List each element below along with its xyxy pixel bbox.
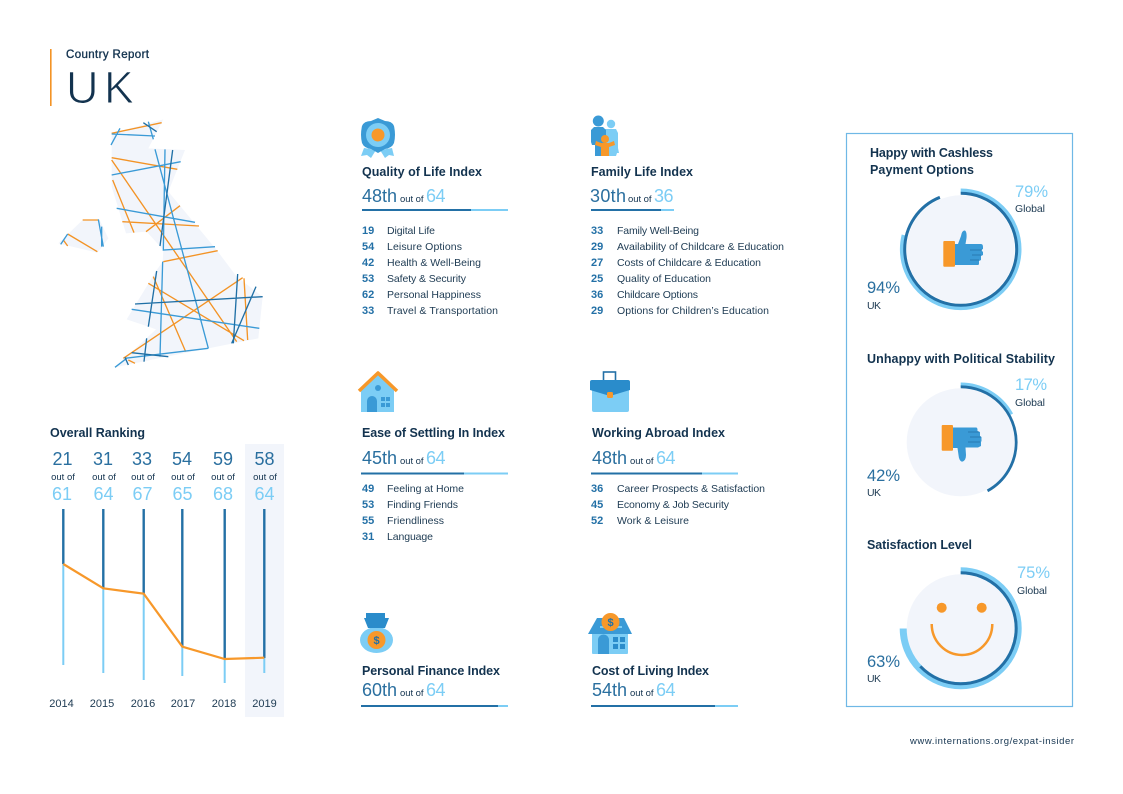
rank labels: out of bbox=[211, 472, 235, 483]
list: settling in subcategories: Language bbox=[387, 531, 433, 543]
list: quality of life subcategories: Safety & Security bbox=[387, 273, 467, 285]
rank labels: 31 bbox=[93, 449, 113, 469]
panel: personal finance index: 64 bbox=[426, 680, 446, 700]
chart: political stability bbox=[867, 352, 1055, 500]
year axis: 2019 bbox=[252, 698, 277, 710]
footer url: www.internations.org/expat-insider bbox=[909, 736, 1074, 747]
panel: cost of living index: 54th bbox=[592, 680, 627, 700]
rank labels: 67 bbox=[132, 484, 153, 504]
panel: family life index: out of bbox=[628, 194, 652, 205]
panel: personal finance index: out of bbox=[400, 688, 424, 699]
list: family life subcategories: 27 bbox=[591, 257, 603, 269]
list: settling in subcategories: 53 bbox=[362, 499, 374, 511]
list: quality of life subcategories: 42 bbox=[362, 257, 374, 269]
chart: satisfaction level: 75% bbox=[1017, 564, 1050, 582]
map of the UK bbox=[58, 119, 263, 367]
panel: cost of living index: out of bbox=[630, 688, 654, 699]
icon: house bbox=[359, 373, 397, 412]
chart: satisfaction level: Global bbox=[1017, 585, 1047, 597]
panel: personal finance index: 60th bbox=[362, 680, 397, 700]
chart: political stability: Global bbox=[1015, 397, 1045, 409]
chart: satisfaction level: 63% bbox=[867, 653, 900, 671]
rank labels: 65 bbox=[172, 484, 193, 504]
rank labels: out of bbox=[253, 472, 277, 483]
icon: house with coin: $ bbox=[607, 617, 614, 629]
list: settling in subcategories: Friendliness bbox=[387, 515, 444, 527]
icon: money bag bbox=[360, 613, 393, 653]
year axis bbox=[49, 698, 277, 710]
list: family life subcategories: Childcare Options bbox=[617, 289, 698, 301]
year axis: 2017 bbox=[171, 698, 195, 710]
icon: thumbs down bbox=[942, 425, 982, 462]
rank labels bbox=[51, 449, 277, 504]
rank labels: 64 bbox=[93, 484, 114, 504]
panel: quality of life index: 64 bbox=[426, 186, 446, 206]
year axis: 2016 bbox=[131, 698, 155, 710]
chart: political stability: UK bbox=[867, 487, 881, 499]
list: working abroad subcategories: 52 bbox=[591, 515, 603, 527]
chart: political stability: Unhappy with Political Stability bbox=[867, 352, 1055, 366]
list: family life subcategories: Family Well-Being bbox=[617, 225, 699, 237]
panel: cost of living index bbox=[588, 613, 738, 707]
list: settling in subcategories: 49 bbox=[362, 483, 374, 495]
list: quality of life subcategories: 53 bbox=[362, 273, 374, 285]
panel: working abroad index: 64 bbox=[656, 448, 676, 468]
list: quality of life subcategories: Personal Happiness bbox=[387, 289, 481, 301]
title: Country Report UK: Country Report bbox=[66, 49, 150, 61]
list: family life subcategories: Quality of Education bbox=[617, 273, 711, 285]
rank labels: 61 bbox=[52, 484, 72, 504]
chart: satisfaction level bbox=[867, 538, 1050, 686]
panel: personal finance index bbox=[360, 613, 508, 707]
list: quality of life subcategories: Leisure Options bbox=[387, 241, 462, 253]
highlight: 2019 column bbox=[245, 444, 284, 717]
list: family life subcategories: 33 bbox=[591, 225, 603, 237]
icon: house with coin bbox=[588, 613, 632, 654]
panel: ease of settling in index bbox=[359, 373, 508, 543]
icon: briefcase bbox=[590, 372, 630, 412]
chart: cashless payment: Global bbox=[1015, 203, 1045, 215]
panel: working abroad index: Working Abroad Index bbox=[592, 426, 725, 440]
panel: family life index: 30th bbox=[590, 186, 626, 206]
list: family life subcategories: 29 bbox=[591, 241, 603, 253]
panel: cost of living index: Cost of Living Index bbox=[592, 664, 709, 678]
list: family life subcategories: Availability of Childcare & Education bbox=[617, 241, 784, 253]
chart: satisfaction level: Satisfaction Level bbox=[867, 538, 972, 552]
rank labels: out of bbox=[51, 472, 75, 483]
list: working abroad subcategories bbox=[591, 483, 765, 527]
panel: ease of settling in index: 64 bbox=[426, 448, 446, 468]
list: working abroad subcategories: 36 bbox=[591, 483, 603, 495]
panel: cost of living index: 64 bbox=[656, 680, 676, 700]
rank labels: 33 bbox=[132, 449, 152, 469]
rank labels: out of bbox=[171, 472, 195, 483]
panel: overall ranking bbox=[49, 426, 284, 717]
icon: money bag: $ bbox=[373, 635, 380, 647]
year axis: 2014 bbox=[49, 698, 74, 710]
panel: quality of life index bbox=[361, 118, 508, 317]
rank labels: out of bbox=[92, 472, 116, 483]
panel: quality of life index: 48th bbox=[362, 186, 397, 206]
list: family life subcategories: Options for Children’s Education bbox=[617, 305, 769, 317]
panel: family life index bbox=[590, 116, 784, 317]
year axis: 2015 bbox=[90, 698, 114, 710]
icon: smiley bbox=[932, 603, 992, 655]
panel: working abroad index bbox=[590, 372, 765, 527]
list: working abroad subcategories: 45 bbox=[591, 499, 603, 511]
rank labels: 68 bbox=[213, 484, 233, 504]
panel: personal finance index: Personal Finance Index bbox=[362, 664, 500, 678]
chart: cashless payment: 79% bbox=[1015, 183, 1048, 201]
title: Country Report UK: UK bbox=[66, 62, 134, 113]
panel: working abroad index: out of bbox=[630, 456, 654, 467]
chart: cashless payment bbox=[867, 146, 1048, 312]
chart: cashless payment: Payment Options bbox=[870, 163, 974, 177]
line chart: ranking by year bbox=[63, 509, 264, 683]
panel: family life index: 36 bbox=[654, 186, 674, 206]
icon: rosette bbox=[361, 118, 395, 158]
panel: quality of life index: Quality of Life Index bbox=[362, 165, 482, 179]
rank labels: 58 bbox=[254, 449, 275, 469]
list: quality of life subcategories: Travel & Transportation bbox=[387, 305, 498, 317]
list: quality of life subcategories: Digital Life bbox=[387, 225, 435, 237]
list: settling in subcategories: Finding Friends bbox=[387, 499, 458, 511]
rank labels: 59 bbox=[213, 449, 233, 469]
rank labels: out of bbox=[131, 472, 155, 483]
chart: cashless payment: 94% bbox=[867, 279, 900, 297]
list: quality of life subcategories: Health & Well-Being bbox=[387, 257, 481, 269]
year axis: 2018 bbox=[212, 698, 236, 710]
list: quality of life subcategories bbox=[362, 225, 498, 317]
panel: ease of settling in index: out of bbox=[400, 456, 424, 467]
list: quality of life subcategories: 33 bbox=[362, 305, 374, 317]
list: quality of life subcategories: 54 bbox=[362, 241, 375, 253]
chart: political stability: 17% bbox=[1015, 376, 1047, 394]
list: family life subcategories: 29 bbox=[591, 305, 603, 317]
list: quality of life subcategories: 62 bbox=[362, 289, 374, 301]
list: settling in subcategories: 31 bbox=[362, 531, 374, 543]
panel: family life index: Family Life Index bbox=[591, 165, 693, 179]
title: Country Report UK bbox=[50, 49, 150, 113]
panel: quality of life index: out of bbox=[400, 194, 424, 205]
chart: cashless payment: Happy with Cashless bbox=[870, 146, 993, 160]
list: settling in subcategories bbox=[362, 483, 464, 543]
list: family life subcategories: Costs of Childcare & Education bbox=[617, 257, 761, 269]
panel: ease of settling in index: Ease of Settling In Index bbox=[362, 426, 505, 440]
icon: thumbs up bbox=[943, 230, 983, 267]
chart: satisfaction level: UK bbox=[867, 673, 881, 685]
list: quality of life subcategories: 19 bbox=[362, 225, 374, 237]
chart: political stability: 42% bbox=[867, 467, 900, 485]
list: settling in subcategories: 55 bbox=[362, 515, 374, 527]
list: family life subcategories: 25 bbox=[591, 273, 603, 285]
panel: ease of settling in index: 45th bbox=[362, 448, 397, 468]
list: family life subcategories bbox=[591, 225, 784, 317]
rank labels: 64 bbox=[254, 484, 275, 504]
icon: family bbox=[591, 116, 619, 156]
list: working abroad subcategories: Economy & Job Security bbox=[617, 499, 730, 511]
list: settling in subcategories: Feeling at Home bbox=[387, 483, 464, 495]
chart: cashless payment: UK bbox=[867, 300, 881, 312]
heading: overall ranking: Overall Ranking bbox=[50, 426, 145, 440]
rank labels: 54 bbox=[172, 449, 192, 469]
panel: working abroad index: 48th bbox=[592, 448, 627, 468]
list: family life subcategories: 36 bbox=[591, 289, 603, 301]
list: working abroad subcategories: Career Prospects & Satisfaction bbox=[617, 483, 765, 495]
list: working abroad subcategories: Work & Leisure bbox=[617, 515, 689, 527]
rank labels: 21 bbox=[52, 449, 73, 469]
panel: satisfaction box bbox=[846, 134, 1072, 706]
